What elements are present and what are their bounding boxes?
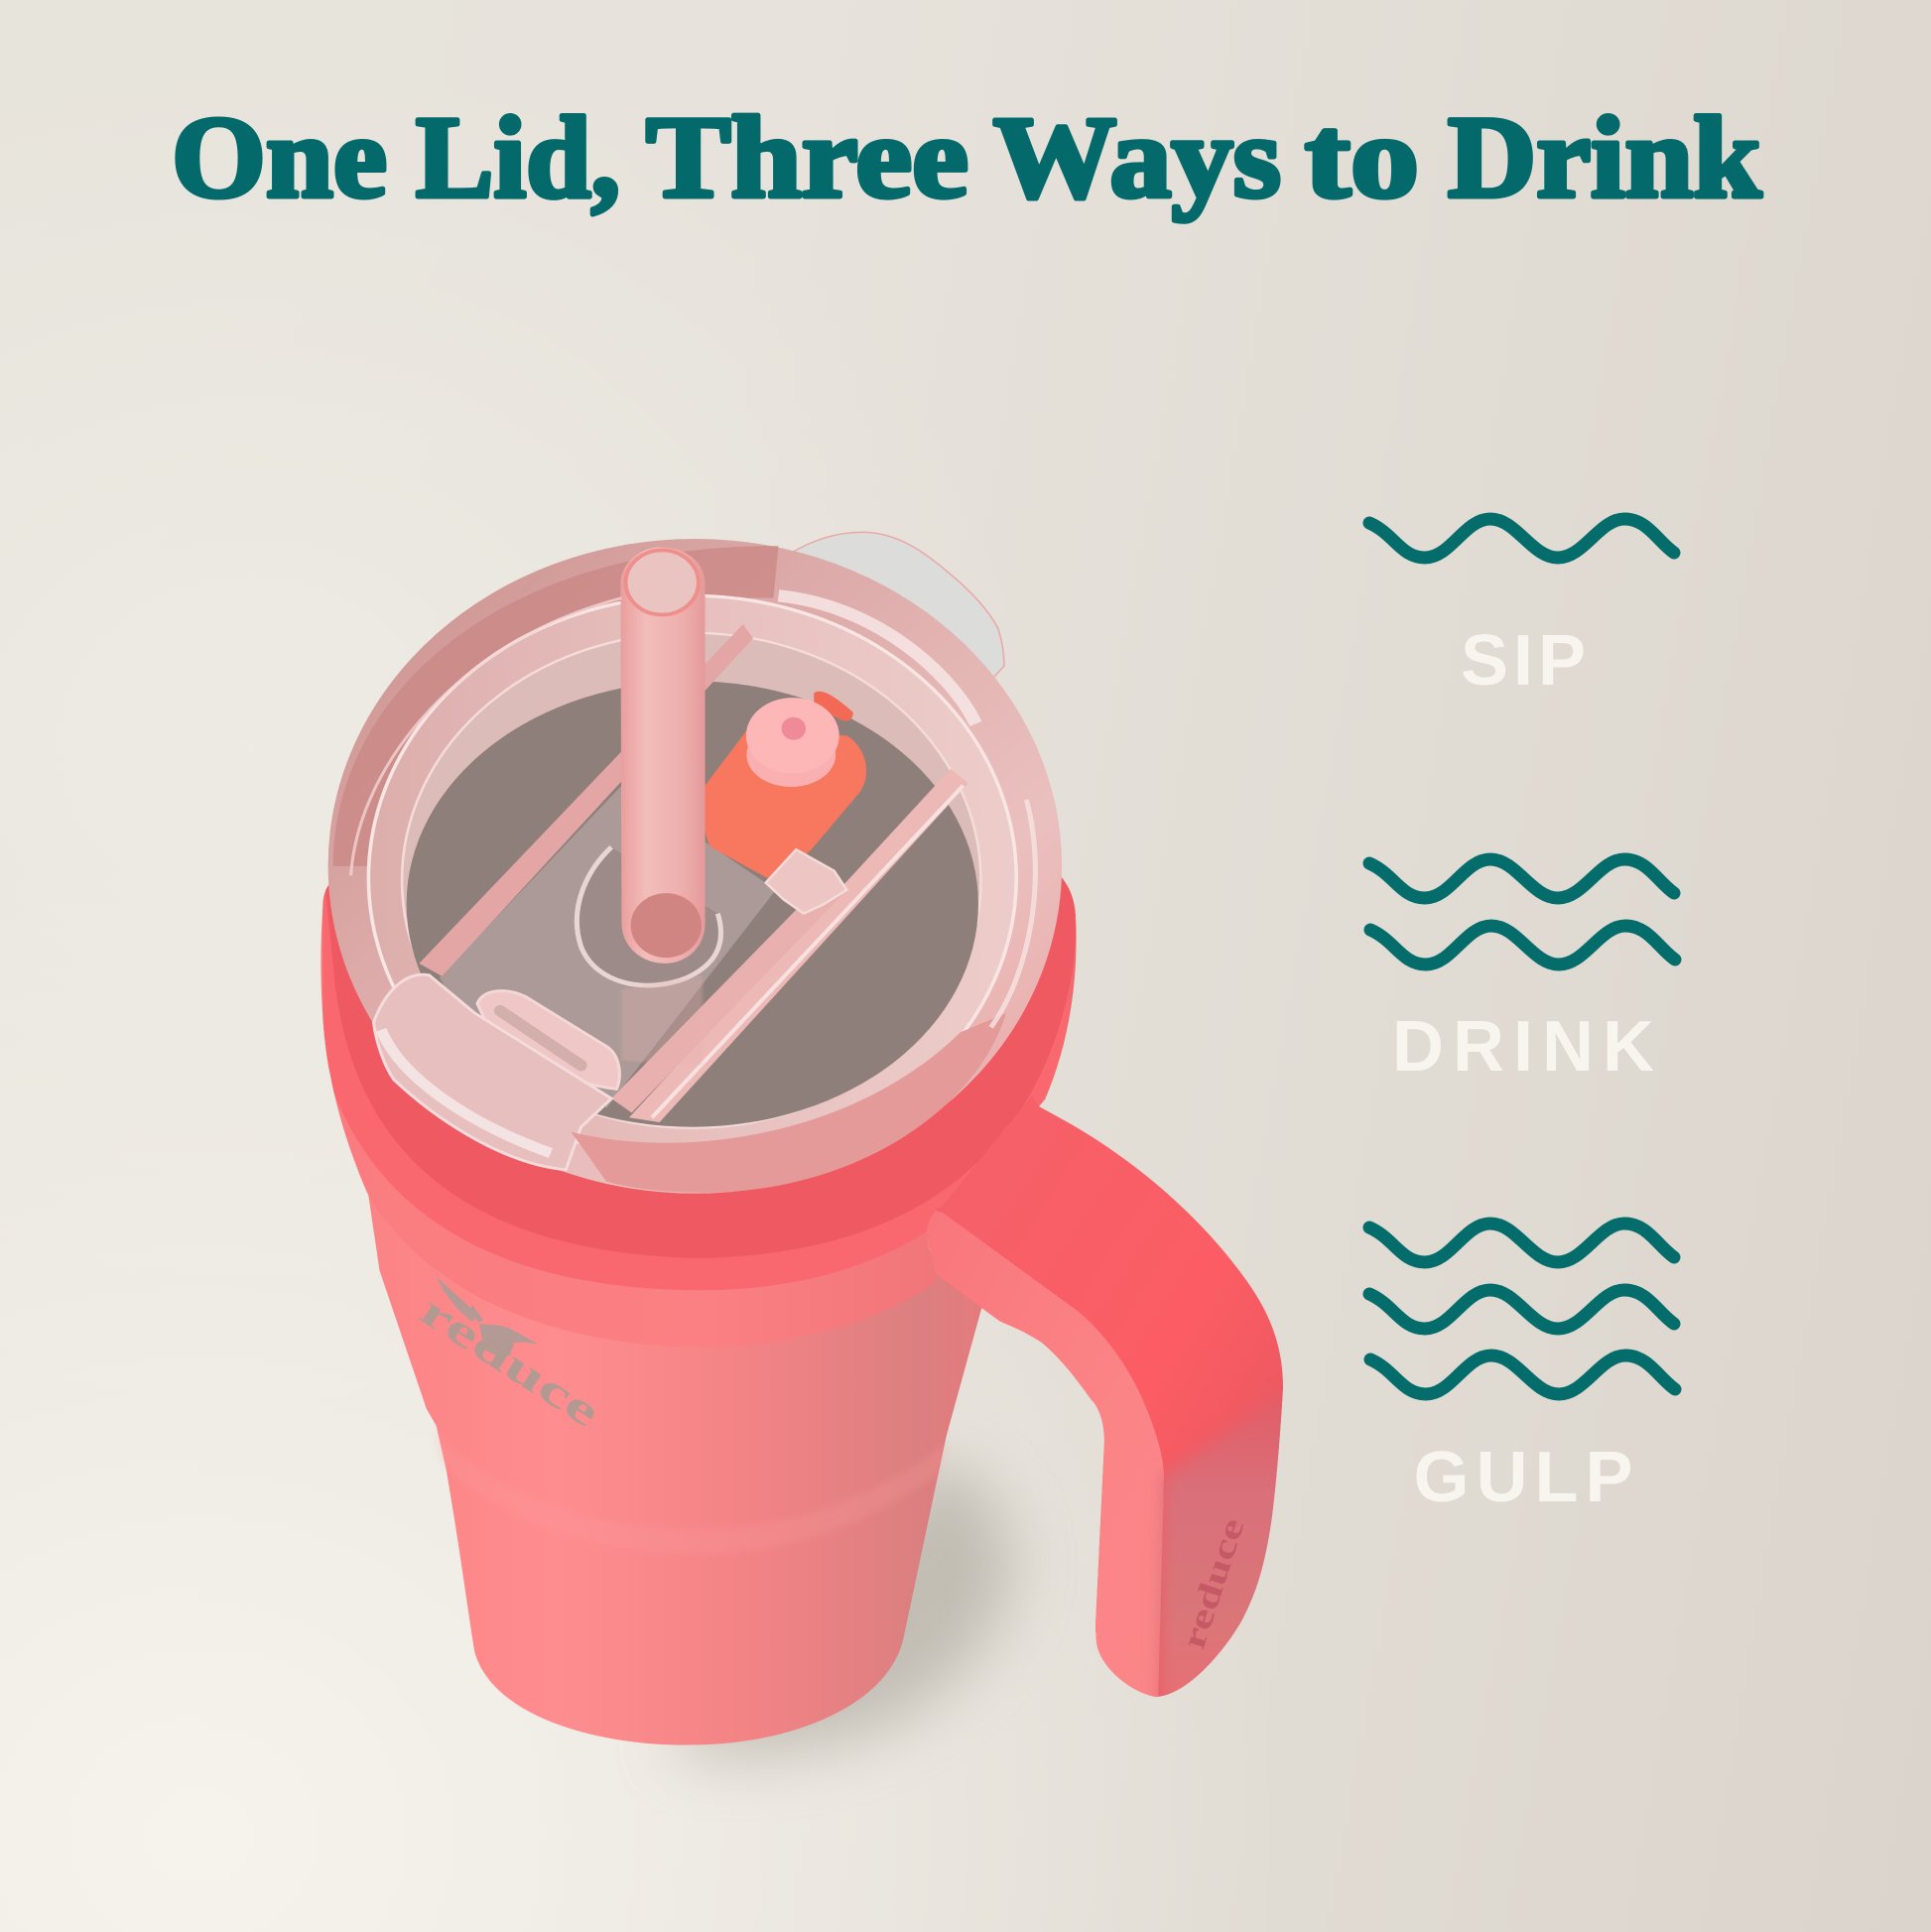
- title: [172, 92, 1761, 222]
- gulp group: [1369, 1224, 1675, 1517]
- pull tab ear: [789, 532, 1004, 686]
- left diagonal bar: [419, 624, 753, 976]
- collar under-lid band: [322, 862, 1085, 1258]
- seal base: [705, 728, 866, 883]
- body logo: [412, 1277, 608, 1437]
- ground shadow: [666, 1454, 1012, 1755]
- sip label: SIP: [1461, 621, 1586, 701]
- handle: [927, 1096, 1283, 1697]
- sip group: [1369, 519, 1674, 701]
- handle main face: [927, 1096, 1283, 1697]
- straw reflection: [621, 975, 703, 1066]
- title: Three: [646, 92, 968, 222]
- straw bottom: [631, 893, 702, 958]
- title: to: [1305, 92, 1419, 222]
- dark interior: [407, 681, 978, 1127]
- rim highlight ring: [368, 595, 1016, 1160]
- lid: [328, 532, 1062, 1194]
- title: Lid,: [416, 92, 620, 222]
- seal strap: [814, 692, 853, 721]
- drink group: [1369, 859, 1675, 1087]
- straw: [620, 548, 706, 964]
- front tab: [373, 974, 611, 1170]
- gasket slot: [500, 1011, 581, 1066]
- gulp label: GULP: [1413, 1438, 1633, 1517]
- drink label: DRINK: [1392, 1007, 1654, 1087]
- seal stopper: [746, 722, 836, 787]
- top rim shade: [333, 546, 778, 866]
- collar: [308, 862, 1096, 1355]
- rim front band: [571, 1013, 1006, 1193]
- gulp waves icon: [1369, 1224, 1675, 1394]
- right glass streak: [991, 800, 1035, 1027]
- logo bird icon: [437, 1277, 539, 1358]
- well: [402, 633, 980, 1128]
- orange seal: [705, 692, 866, 883]
- stopper centre: [782, 717, 806, 740]
- sip waves icon: [1369, 519, 1674, 558]
- logo text: reduce: [412, 1285, 608, 1437]
- outer rim: [328, 539, 1062, 1194]
- clip: [766, 849, 846, 914]
- straw hole: [577, 847, 720, 985]
- right bar highlight: [652, 786, 964, 1117]
- collar lip: [322, 862, 1085, 1290]
- front tab highlight: [381, 1030, 551, 1153]
- tumbler body: [365, 1171, 995, 1745]
- collar outer: [308, 862, 1096, 1355]
- gasket: [477, 991, 619, 1090]
- top right highlight: [778, 595, 975, 723]
- title: Ways: [993, 92, 1281, 222]
- handle inner stripe: [918, 1206, 1164, 1707]
- product photo: tumbler: [308, 862, 1300, 1755]
- straw tube: [620, 548, 706, 964]
- handle end face: [1155, 1389, 1283, 1697]
- title: Drink: [1448, 92, 1761, 222]
- straw top opening: [625, 550, 699, 615]
- slider right edge: [611, 871, 846, 1112]
- body seam band: [434, 1430, 947, 1554]
- slider plate: [440, 786, 776, 1108]
- drink waves icon: [1369, 859, 1675, 965]
- title: One: [172, 92, 387, 222]
- handle logo: reduce: [1175, 1514, 1252, 1653]
- left glass streak: [351, 598, 621, 875]
- right diagonal bar: [629, 769, 968, 1122]
